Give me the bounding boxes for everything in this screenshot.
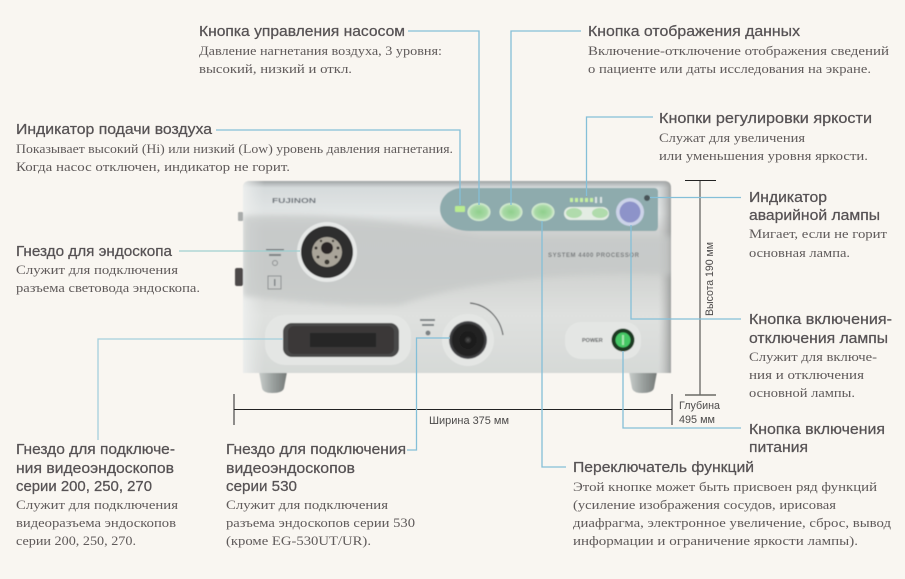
text: video socket 200/250/270 xyxy=(16,441,178,548)
video socket plate xyxy=(265,315,411,365)
depth label: Глубина xyxy=(679,400,721,412)
brightness rocker xyxy=(564,207,609,220)
text: pump button: Давление нагнетания воздуха, 3 уровня: xyxy=(199,43,442,58)
power plate xyxy=(565,322,641,359)
knob marks xyxy=(420,319,435,336)
text: video socket 200/250/270: Гнездо для подключе- xyxy=(16,441,175,458)
air indicator xyxy=(455,206,465,212)
leader: scope socket xyxy=(179,250,300,252)
leader: video socket xyxy=(98,339,283,440)
text: power button: Кнопка включения xyxy=(749,421,885,438)
text: brightness buttons: Кнопки регулировки яркости xyxy=(659,110,872,127)
brightness level bar xyxy=(570,197,602,203)
rear tab xyxy=(238,212,243,221)
side connector xyxy=(235,268,243,286)
text: video socket 530: видеоэндоскопов xyxy=(226,460,355,477)
text: lamp button: основной лампы. xyxy=(749,385,855,400)
brand logo: FUJINON xyxy=(272,196,316,205)
scope socket xyxy=(297,222,357,282)
text: air indicator: Когда насос отключен, индикатор не горит. xyxy=(16,159,290,174)
text: pump button: Кнопка управления насосом xyxy=(199,23,405,40)
text: function switch: Переключатель функций xyxy=(573,459,754,476)
text: scope socket: Гнездо для эндоскопа xyxy=(16,243,173,260)
scope socket marks xyxy=(266,249,284,289)
leader: 530 socket xyxy=(407,338,450,450)
text: video socket 200/250/270: серии 200, 250, 270 xyxy=(16,478,152,495)
text: emergency lamp: аварийной лампы xyxy=(749,207,880,224)
leader: pump button xyxy=(408,31,479,205)
text: power button xyxy=(749,421,885,456)
text: function switch: диафрагма, электронное увеличение, сброс, вывод xyxy=(573,515,891,530)
text: emergency lamp: основная лампа. xyxy=(749,245,850,260)
text: video socket 200/250/270: видеоразъема эндоскопов xyxy=(16,515,176,530)
text: function switch: Этой кнопке может быть присвоен ряд функций xyxy=(573,479,877,494)
depth label xyxy=(679,400,721,426)
text: air indicator: Индикатор подачи воздуха xyxy=(16,121,213,138)
model label: SYSTEM 4400 PROCESSOR xyxy=(548,253,640,259)
text: scope socket: разъема световода эндоскопа. xyxy=(16,280,200,295)
device body xyxy=(243,181,671,373)
text: pump button xyxy=(199,23,442,76)
text: data button: о пациенте или даты исследования на экране. xyxy=(588,61,871,76)
function knob xyxy=(449,321,487,359)
leader: power button xyxy=(623,351,741,428)
text: air indicator xyxy=(16,121,453,174)
left foot xyxy=(259,372,287,393)
text: lamp button: Кнопка включения- xyxy=(749,311,892,328)
text: video socket 530: разъема эндоскопов серии 530 xyxy=(226,515,415,530)
text: lamp button: отключения лампы xyxy=(749,330,888,347)
text: data button xyxy=(588,23,889,76)
control panel xyxy=(440,188,658,231)
text: power button: питания xyxy=(749,439,808,456)
body swoosh band xyxy=(243,215,671,306)
text: data button: Кнопка отображения данных xyxy=(588,23,801,40)
power label: POWER xyxy=(582,338,603,344)
text: scope socket: Служит для подключения xyxy=(16,262,178,277)
leader: brightness xyxy=(586,117,653,196)
leader: air indicator xyxy=(216,130,460,205)
leader: data button xyxy=(511,31,581,205)
text: emergency lamp xyxy=(749,189,887,260)
device: endoscopy processor xyxy=(235,181,671,393)
text: emergency lamp: Индикатор xyxy=(749,189,827,206)
text: function switch: (усиление изображения сосудов, ирисовая xyxy=(573,497,836,512)
depth label: 495 мм xyxy=(679,414,715,426)
width label: Ширина 375 мм xyxy=(429,415,509,427)
height label: Высота 190 мм xyxy=(704,242,716,316)
pump button xyxy=(468,203,490,221)
text: lamp button: Служит для включе- xyxy=(749,349,877,364)
text: brightness buttons: или уменьшения уровня яркости. xyxy=(659,148,868,163)
power button xyxy=(612,328,634,352)
right foot xyxy=(629,372,657,393)
leader: emergency lamp xyxy=(650,196,741,198)
data button xyxy=(500,203,522,221)
text: pump button: высокий, низкий и откл. xyxy=(199,61,352,76)
text: brightness buttons xyxy=(659,110,872,163)
text: video socket 200/250/270: ния видеоэндоскопов xyxy=(16,460,174,477)
body side shading xyxy=(243,181,671,373)
text: data button: Включение-отключение отображения сведений xyxy=(588,43,889,58)
leader: lamp button xyxy=(631,225,741,319)
text: function switch: информации и ограничение яркости лампы). xyxy=(573,533,858,548)
knob plate xyxy=(442,314,494,366)
function button xyxy=(532,203,554,221)
text: video socket 530: (кроме EG-530UT/UR). xyxy=(226,533,371,548)
text: video socket 200/250/270: Служит для подключения xyxy=(16,497,178,512)
text: emergency lamp: Мигает, если не горит xyxy=(749,226,887,241)
text: brightness buttons: Служат для увеличения xyxy=(659,130,805,145)
emergency lamp indicator xyxy=(644,195,650,201)
text: lamp button xyxy=(749,311,892,400)
text: air indicator: Показывает высокий (Hi) или низкий (Low) уровень давления нагнетания. xyxy=(16,141,453,156)
text: video socket 530 xyxy=(226,441,415,548)
text: scope socket xyxy=(16,243,200,295)
text: video socket 530: Гнездо для подключения xyxy=(226,441,406,458)
width dimension xyxy=(234,394,672,427)
video connector xyxy=(283,323,399,357)
text: video socket 530: Служит для подключения xyxy=(226,497,388,512)
lamp button xyxy=(616,198,644,226)
text: video socket 530: серии 530 xyxy=(226,478,297,495)
leader: function switch xyxy=(542,221,566,467)
text: lamp button: ния и отключения xyxy=(749,367,864,382)
text: video socket 200/250/270: серии 200, 250, 270. xyxy=(16,533,136,548)
text: function switch xyxy=(573,459,891,548)
rotation arc xyxy=(470,303,503,335)
